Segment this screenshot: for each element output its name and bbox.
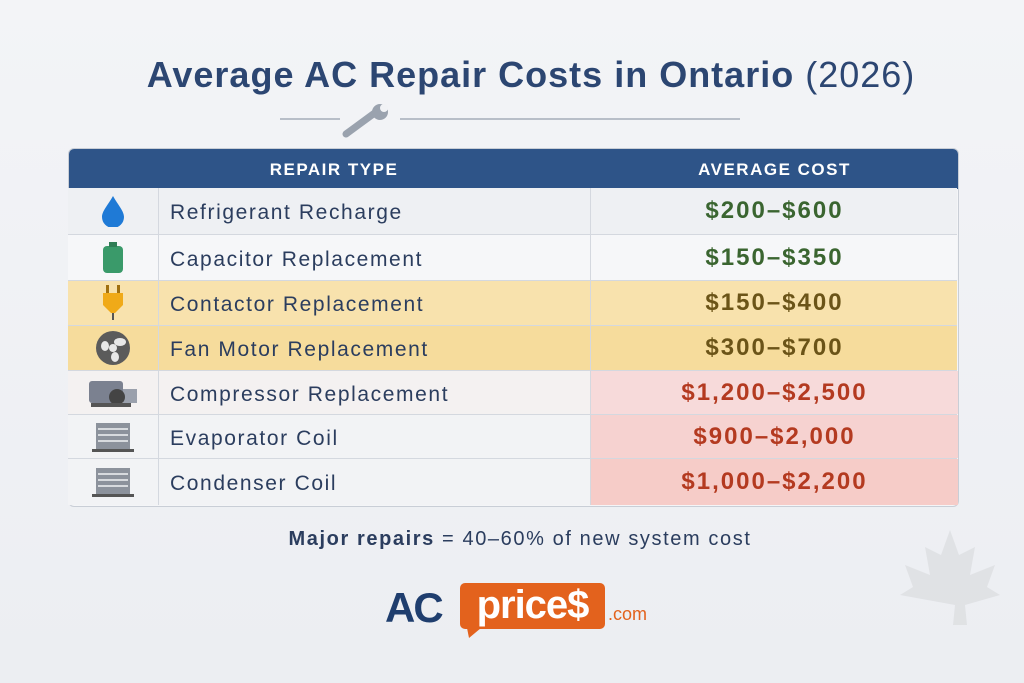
row: compressor: Compressor Replacement bbox=[170, 382, 449, 406]
row: evaporator: $900–$2,000 bbox=[693, 422, 856, 450]
table header: AVERAGE COST bbox=[698, 160, 851, 179]
row: compressor: $1,200–$2,500 bbox=[681, 378, 868, 406]
row: condenser: Condenser Coil bbox=[170, 472, 337, 495]
row: capacitor: Capacitor Replacement bbox=[170, 248, 423, 270]
row: evaporator bbox=[68, 415, 957, 459]
title: Average AC Repair Costs in Ontario (2026) bbox=[147, 54, 915, 95]
logo: price$ bbox=[477, 583, 588, 627]
row: refrigerant: $200–$600 bbox=[705, 197, 844, 224]
table header: REPAIR TYPE bbox=[270, 160, 398, 179]
row: contactor bbox=[68, 281, 957, 326]
table header bbox=[69, 149, 958, 189]
table bbox=[68, 148, 959, 507]
row: contactor: Contactor Replacement bbox=[170, 293, 424, 316]
row: fan motor: Fan Motor Replacement bbox=[170, 338, 429, 361]
row: refrigerant bbox=[68, 188, 957, 235]
row: fan motor: $300–$700 bbox=[705, 334, 844, 361]
row: fan motor bbox=[68, 326, 957, 371]
logo bbox=[385, 583, 647, 638]
row: condenser bbox=[68, 459, 957, 505]
row: condenser: $1,000–$2,200 bbox=[681, 468, 868, 495]
row: evaporator: Evaporator Coil bbox=[170, 426, 339, 450]
row: capacitor: $150–$350 bbox=[705, 244, 844, 270]
row: compressor bbox=[68, 371, 957, 415]
row: refrigerant: Refrigerant Recharge bbox=[170, 201, 403, 224]
logo: AC bbox=[385, 584, 442, 631]
icon: wrench divider bbox=[280, 104, 740, 138]
icon: maple leaf bbox=[900, 531, 1000, 625]
footnote: Major repairs = 40–60% of new system cost bbox=[288, 528, 752, 550]
row: contactor: $150–$400 bbox=[705, 289, 844, 316]
row: capacitor bbox=[68, 235, 957, 281]
logo: .com bbox=[608, 604, 647, 624]
